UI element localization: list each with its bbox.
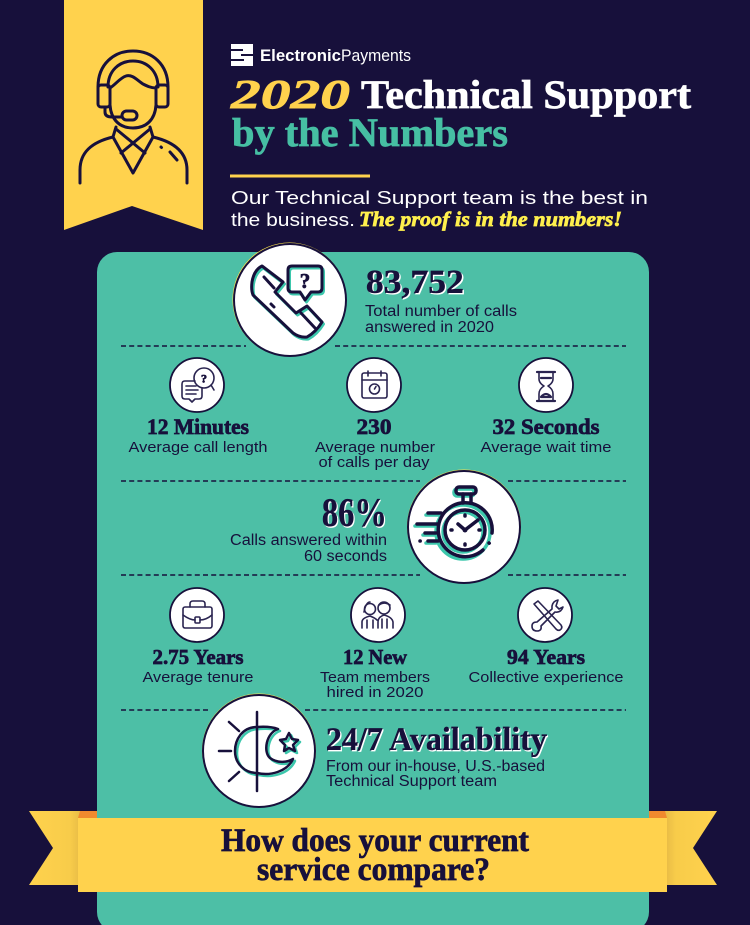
- folds: [78, 811, 667, 818]
- stat: total calls: Total number of calls: [365, 303, 517, 320]
- stat: tenure: 2.75 Years: [152, 645, 244, 669]
- stat: calls per day: [315, 358, 435, 471]
- stat: answered within 60 seconds: 60 seconds: [304, 548, 387, 565]
- intro text: the business.: [231, 209, 355, 230]
- stat: new team members: 12 New: [343, 645, 408, 669]
- stat: total calls: 83,752: [366, 264, 464, 301]
- stat: call length: [128, 358, 268, 456]
- stat: calls per day: of calls per day: [318, 454, 430, 471]
- icon: stopwatch: [407, 470, 521, 584]
- banner text: How does your current: [221, 823, 529, 859]
- stat: collective experience: Collective experience: [468, 669, 624, 686]
- stat: availability: Technical Support team: [326, 773, 497, 790]
- stat: collective experience: [468, 588, 624, 686]
- stat: answered within 60 seconds: 86%: [322, 490, 387, 535]
- stat: call length: Average call length: [128, 439, 268, 456]
- left tail: [29, 811, 97, 885]
- icon: headset agent: [80, 51, 187, 183]
- stat: answered within 60 seconds: Calls answered within: [230, 532, 387, 549]
- intro text: The proof is in the numbers!: [359, 207, 622, 231]
- stat: calls per day: Average number: [315, 439, 435, 456]
- stat: wait time: 32 Seconds: [492, 414, 600, 439]
- banner: call to action: [29, 811, 717, 892]
- intro text: [231, 187, 648, 231]
- dividers: [121, 346, 626, 710]
- stat: answered within 60 seconds: [230, 470, 521, 584]
- icon: hourglass: [519, 358, 573, 412]
- title: by the Numbers: [232, 110, 508, 155]
- stat: new team members: [320, 588, 430, 701]
- stat: new team members: hired in 2020: [326, 684, 424, 701]
- banner text: service compare?: [257, 852, 490, 888]
- title: [230, 71, 692, 155]
- icon: phone with question: ?: [300, 269, 310, 293]
- icon: wrench and screwdriver: [518, 588, 572, 642]
- banner body: [78, 818, 667, 892]
- right tail: [649, 811, 717, 885]
- logo: [231, 44, 411, 66]
- panel: stats: [97, 252, 649, 925]
- stat: new team members: Team members: [320, 669, 430, 686]
- icon: sun and moon: [202, 694, 316, 808]
- logo: Payments: [341, 46, 411, 65]
- stat: tenure: Average tenure: [142, 669, 254, 686]
- title: 2020: [230, 71, 350, 117]
- icon: calendar clock: [347, 358, 401, 412]
- stat: tenure: [142, 588, 254, 686]
- stat: total calls: [232, 242, 517, 356]
- title: Technical Support: [361, 72, 692, 117]
- stat: calls per day: 230: [356, 414, 392, 439]
- stat: total calls: answered in 2020: [365, 319, 494, 336]
- stat: collective experience: 94 Years: [507, 645, 585, 669]
- intro text: Our Technical Support team is the best in: [231, 187, 648, 208]
- logo: Electronic: [260, 46, 341, 65]
- yellow ribbon with support agent icon: [64, 0, 203, 230]
- banner text: [221, 823, 529, 888]
- stat: call length: 12 Minutes: [147, 414, 249, 439]
- stat: wait time: Average wait time: [480, 439, 612, 456]
- stat: availability: 24/7 Availability: [326, 722, 547, 758]
- stat: wait time: [480, 358, 612, 456]
- stat: availability: From our in-house, U.S.-based: [326, 758, 545, 775]
- stat: availability: [202, 694, 547, 808]
- icon: chat bubbles: ?: [201, 372, 207, 386]
- title underline: [230, 174, 370, 178]
- icon: briefcase: [170, 588, 224, 642]
- icon: phone with question: [232, 242, 346, 356]
- icon: team: [351, 588, 405, 642]
